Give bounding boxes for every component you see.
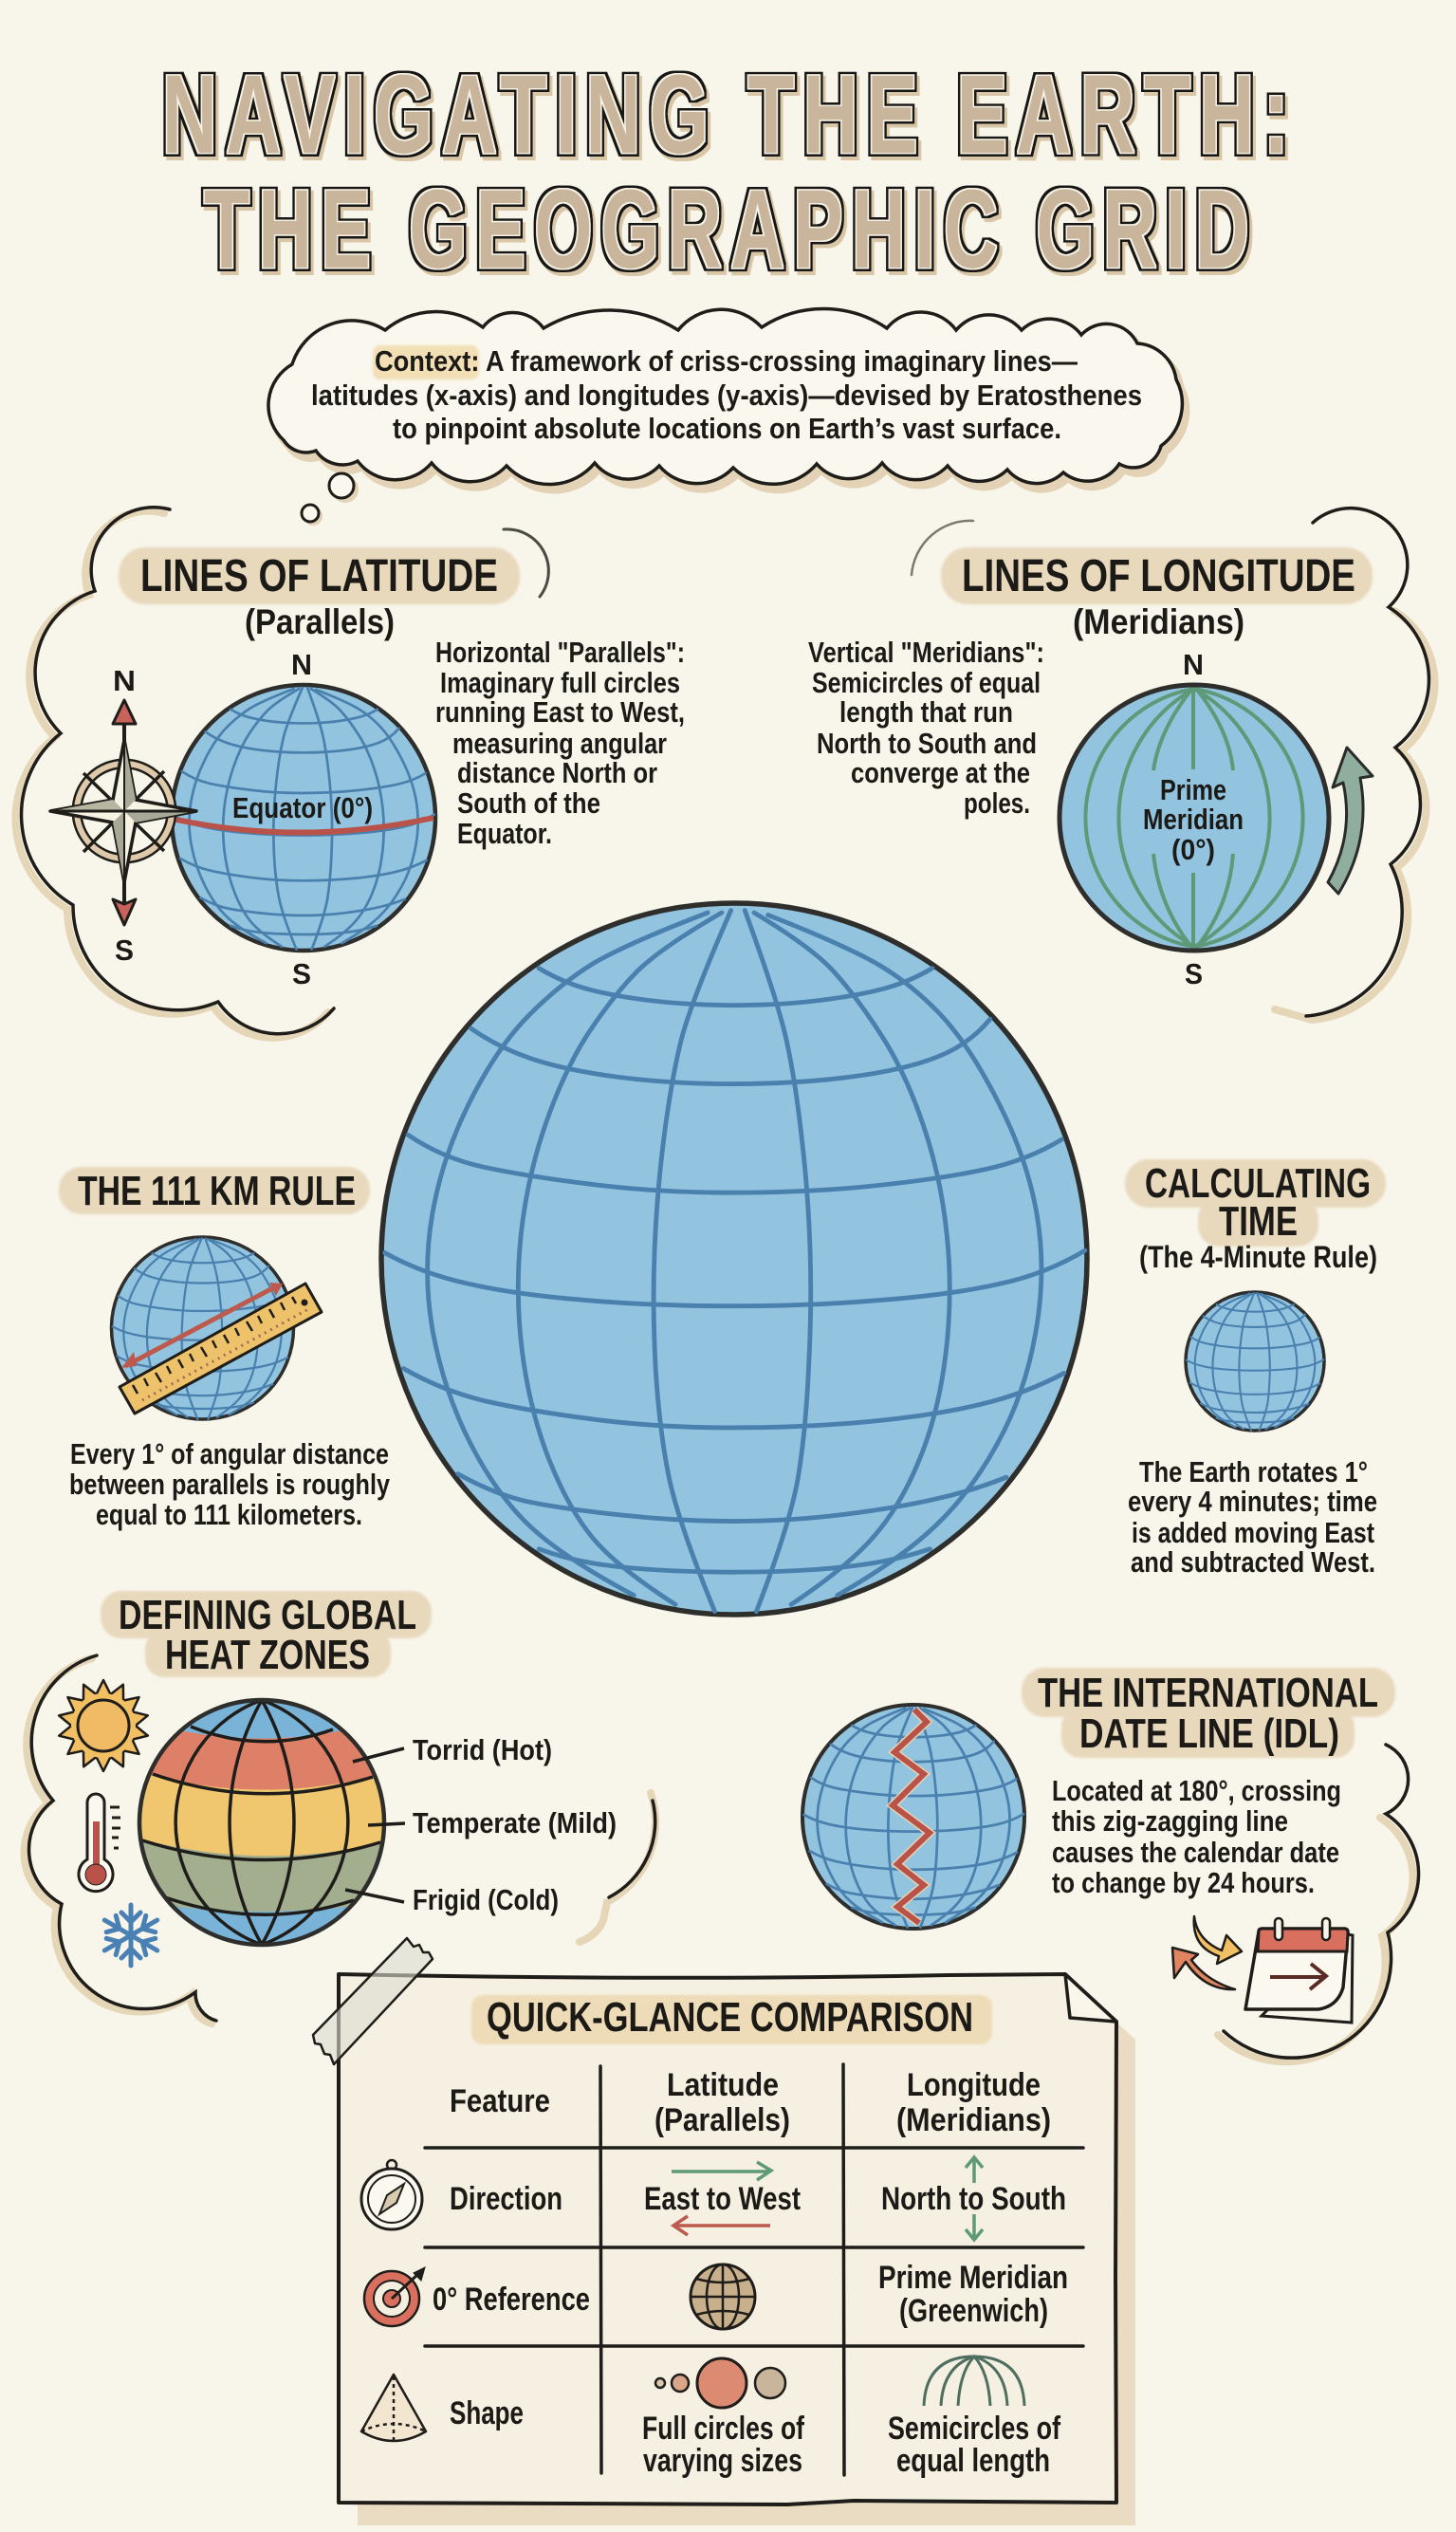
latitude heading [119,547,520,641]
latitude globe: N [291,648,312,681]
longitude description: Vertical "Meridians": [808,636,1044,669]
heat zone labels: Torrid (Hot) [413,1733,552,1766]
table header row [450,2067,1051,2138]
context text: Context: A framework of criss-crossing imaginary lines— [375,344,1078,378]
context thought cloud [268,309,1187,526]
icon: snowflake [100,1905,162,1966]
table header row: (Parallels) [654,2102,790,2138]
row: direction [361,2157,1066,2240]
longitude globe: S [1185,957,1203,990]
calculating time text: is added moving East [1132,1516,1374,1549]
panel: international date line [802,1668,1419,2061]
longitude description: length that run [839,695,1013,729]
latitude description: distance North or [457,756,657,789]
zig-zag date line [893,1710,930,1923]
row: shape [361,2356,1061,2479]
table header row: Latitude [667,2067,779,2103]
calculating time text [1128,1455,1377,1579]
longitude globe [1060,648,1329,990]
longitude heading: (Meridians) [1073,602,1244,641]
arrow: north [966,2157,983,2183]
latitude globe: S [292,957,311,990]
panel: defining global heat zones [25,1591,655,2024]
IDL text: Located at 180°, crossing [1052,1774,1341,1807]
latitude description: measuring angular [452,727,667,760]
row: direction: East to West [644,2181,801,2217]
latitude description: Imaginary full circles [440,666,680,699]
111 km text: Every 1° of angular distance [70,1437,389,1470]
heat zones heading: DEFINING GLOBAL [119,1592,416,1638]
latitude description: Horizontal "Parallels": [435,636,685,669]
table header row: (Meridians) [896,2102,1051,2138]
context text: latitudes (x-axis) and longitudes (y-axis)—devised by Eratosthenes [311,379,1142,412]
table header row: Feature [450,2083,550,2119]
IDL globe [802,1705,1024,1929]
IDL heading [1022,1668,1395,1758]
latitude heading: (Parallels) [245,602,395,641]
arrow: rotation [1328,748,1373,894]
IDL text: causes the calendar date [1052,1836,1339,1869]
arrow: east [672,2162,771,2180]
context text [311,344,1142,445]
panel: quick-glance comparison table [313,1938,1135,2525]
calculating time text: The Earth rotates 1° [1139,1455,1368,1488]
row: direction: North to South [881,2181,1066,2217]
longitude description: North to South and [817,727,1037,760]
longitude globe: N [1183,648,1204,681]
111 km text [69,1437,391,1531]
arrow: south [966,2214,983,2240]
globe with ruler [112,1237,322,1419]
icon: cone [361,2375,426,2445]
row: shape: Full circles of [642,2411,805,2447]
111 km text: equal to 111 kilometers. [96,1498,362,1531]
panel: the 111 km rule [59,1167,391,1531]
row: shape: equal length [896,2443,1050,2479]
panel: calculating time [1125,1159,1386,1579]
latitude globe: Equator (0°) [232,791,373,824]
IDL heading: DATE LINE (IDL) [1079,1710,1339,1757]
row: 0 degree reference [364,2260,1068,2329]
panel: lines of latitude [16,508,685,1038]
arrow: west [673,2216,770,2235]
red distance line [121,1283,283,1368]
111 km text: between parallels is roughly [69,1468,391,1501]
central globe [381,903,1087,1615]
title [162,52,1298,292]
icon: compass rose [50,664,196,967]
latitude description [435,636,685,850]
IDL text [1052,1774,1341,1899]
calculating time heading: CALCULATING [1145,1160,1371,1207]
heat zone labels [345,1733,617,1916]
heat zone labels: Frigid (Cold) [413,1883,559,1916]
prime meridian label [1143,773,1244,866]
latitude description: Equator. [457,817,552,850]
icon: calendar [1245,1918,1353,2023]
row: 0 degree reference: (Greenwich) [899,2293,1048,2329]
longitude description: poles. [964,786,1030,820]
heat zone globe [137,1698,387,1947]
latitude globe [172,648,435,990]
table grid [425,2064,1083,2475]
equator line [176,818,433,833]
longitude description: Semicircles of equal [812,666,1041,699]
icon: sun [53,1674,154,1777]
calculating time text: and subtracted West. [1131,1545,1375,1579]
111 km heading: THE 111 KM RULE [78,1168,356,1214]
icon: compass rose: N [113,664,136,697]
row: 0 degree reference: 0° Reference [433,2282,590,2318]
longitude description [808,636,1044,820]
icon: target [364,2267,425,2326]
heat zone labels: Temperate (Mild) [413,1806,617,1839]
calculating time heading [1125,1159,1386,1274]
prime meridian label: Meridian [1143,803,1244,836]
icon: tan globe [691,2264,755,2329]
row: shape: Semicircles of [888,2411,1061,2447]
calculating time heading: (The 4-Minute Rule) [1139,1240,1377,1274]
row: direction: Direction [450,2181,562,2217]
latitude heading: LINES OF LATITUDE [140,551,498,601]
latitude description: South of the [457,786,600,820]
IDL text: this zig-zagging line [1052,1804,1288,1838]
context text: to pinpoint absolute locations on Earth’s vast surface. [393,412,1061,445]
latitude description: running East to West, [435,695,685,729]
calculating time heading: TIME [1219,1198,1298,1245]
heat zones heading: HEAT ZONES [165,1632,370,1678]
icon: compass rose: S [115,933,134,967]
longitude heading: LINES OF LONGITUDE [962,551,1355,601]
prime meridian label: (0°) [1171,833,1215,866]
ruler [120,1284,322,1414]
table header row: Longitude [907,2067,1041,2103]
IDL text: to change by 24 hours. [1052,1866,1315,1899]
icon: circles of varying sizes [655,2358,785,2408]
arrow: yellow [1194,1916,1242,1964]
longitude heading [941,547,1373,641]
calculating time text: every 4 minutes; time [1128,1485,1377,1518]
row: shape: Shape [450,2395,524,2431]
icon: compass [361,2160,422,2229]
icon: thermometer [79,1794,120,1892]
arrow: orange [1172,1948,1235,1989]
prime meridian label: Prime [1160,773,1226,806]
heat zones heading [101,1591,432,1678]
icon: semicircles [924,2356,1024,2406]
row: shape: varying sizes [643,2443,802,2479]
tape [313,1938,433,2064]
table heading: QUICK-GLANCE COMPARISON [487,1994,973,2041]
panel: lines of longitude [808,508,1434,1020]
small globe [1186,1292,1324,1431]
longitude description: converge at the [851,756,1030,789]
row: 0 degree reference: Prime Meridian [878,2260,1068,2296]
